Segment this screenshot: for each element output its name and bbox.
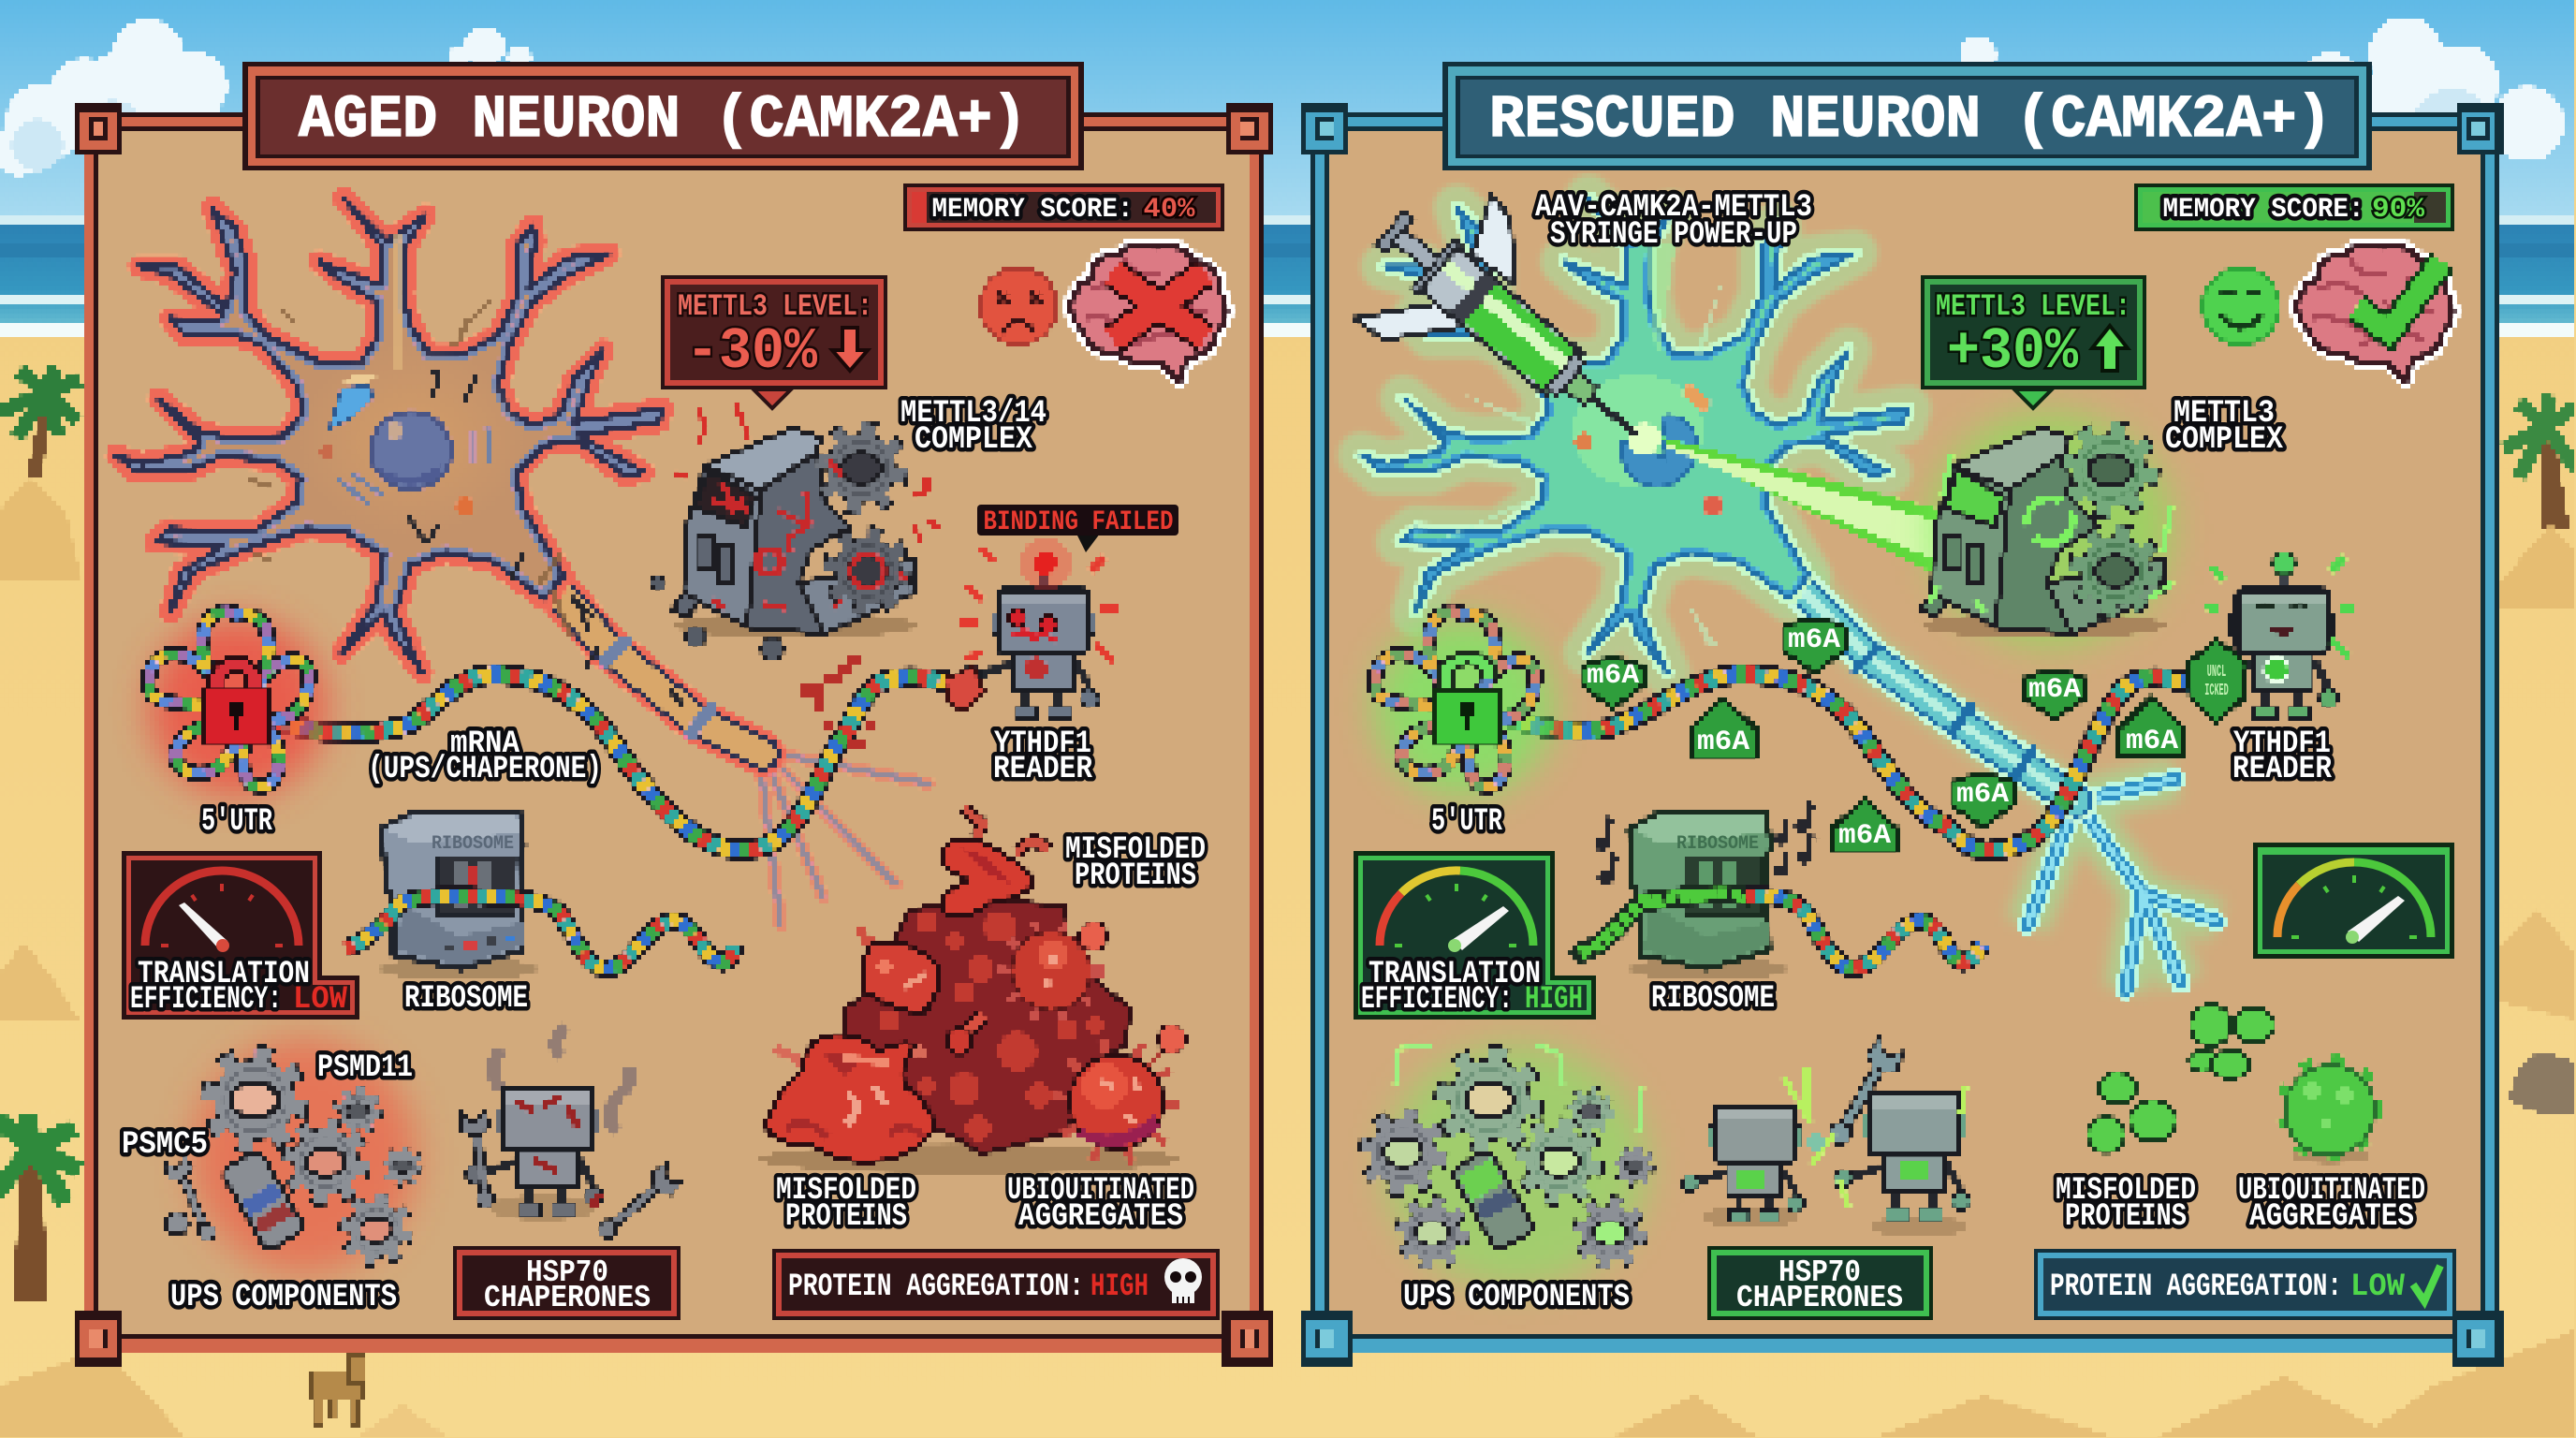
panel: rescued neuron xyxy=(1305,62,2499,1362)
labels: aged panel: RIBOSOME xyxy=(432,833,514,855)
label: HSP70 chaperones rescued: CHAPERONES xyxy=(1736,1281,1903,1315)
labels: aged panel: mRNA xyxy=(450,726,520,762)
gauge: translation efficiency high: EFFICIENCY: xyxy=(1361,982,1513,1018)
metric: memory score 40%: MEMORY SCORE: xyxy=(932,194,1133,226)
gauge: translation efficiency high: TRANSLATION xyxy=(1368,957,1541,992)
HSP70 robot: broken xyxy=(459,1025,684,1246)
icon: skull xyxy=(1164,1258,1202,1303)
metric: protein aggregation high xyxy=(772,1249,1220,1320)
gauge: translation efficiency high: HIGH xyxy=(1525,982,1583,1018)
UPS components: repaired gears xyxy=(1368,1044,1651,1287)
label: HSP70 chaperones xyxy=(453,1246,681,1320)
title banner: aged neuron xyxy=(242,62,1084,170)
UPS components: broken gears xyxy=(162,1039,419,1273)
pin: unlocked xyxy=(2188,639,2247,723)
pin label: unlocked: UNCL xyxy=(2207,663,2247,682)
aggregate ball xyxy=(1010,922,1107,1012)
panel: aged neuron xyxy=(76,62,1271,1362)
brain with red X xyxy=(1071,244,1226,381)
metric: protein aggregation low xyxy=(2034,1249,2456,1320)
ribosome: aged xyxy=(345,813,735,980)
beam: METTL3 expression xyxy=(1629,423,1939,576)
camel xyxy=(311,1356,365,1426)
callout: METTL3 level -30%: METTL3 LEVEL: xyxy=(678,289,872,324)
labels: aged panel: COMPLEX xyxy=(915,422,1033,458)
gauge: translation efficiency low: EFFICIENCY: xyxy=(130,982,282,1018)
METTL3 complex: powered machine xyxy=(1920,412,2174,646)
panel frame: aged xyxy=(76,108,1271,1362)
callout: METTL3 level -30% xyxy=(661,275,887,408)
misfolded lump: top xyxy=(942,808,1048,916)
labels: rescued panel: PROTEINS xyxy=(2065,1199,2187,1235)
label: HSP70 chaperones rescued xyxy=(1707,1246,1933,1320)
icon: check mark xyxy=(2413,1266,2440,1301)
misfolded lump: lower left xyxy=(765,1034,933,1162)
callout: METTL3 level +30% xyxy=(1921,275,2146,408)
labels: rescued panel: SYRINGE POWER-UP xyxy=(1550,217,1797,253)
mRNA strand: aged xyxy=(271,674,953,850)
callout: binding failed: BINDING FAILED xyxy=(983,506,1174,538)
callout: binding failed xyxy=(977,505,1178,552)
ubiquitinated aggregates: cleared xyxy=(2283,1062,2377,1164)
labels: aged panel: RIBOSOME xyxy=(404,981,528,1017)
m6A labels: m6A xyxy=(1838,820,1891,852)
labels: aged panel: UPS COMPONENTS xyxy=(170,1280,397,1315)
m6A labels: m6A xyxy=(1697,726,1749,758)
callout: METTL3 level -30%: -30% xyxy=(686,318,818,385)
labels: aged panel: (UPS/CHAPERONE) xyxy=(368,752,602,787)
labels: aged panel: YTHDF1 xyxy=(994,726,1091,762)
m6A labels xyxy=(1587,624,2178,852)
metric: memory score 90%: MEMORY SCORE: xyxy=(2162,194,2364,226)
labels: rescued panel: READER xyxy=(2232,752,2333,787)
callout: METTL3 level +30%: +30% xyxy=(1947,318,2079,385)
m6A markers xyxy=(1582,620,2185,852)
labels: rescued panel: UBIQUITINATED xyxy=(2238,1173,2425,1209)
labels: rescued panel: YTHDF1 xyxy=(2233,726,2331,762)
metric: protein aggregation low: PROTEIN AGGREGATION: xyxy=(2050,1269,2342,1305)
m6A labels: m6A xyxy=(1788,624,1840,656)
misfolded proteins: cleared xyxy=(2087,1005,2275,1152)
panel: rescued neuron: ICKED xyxy=(2204,682,2229,700)
palm: right xyxy=(2501,395,2576,609)
brain with green check xyxy=(2297,244,2452,381)
callout: METTL3 level +30%: METTL3 LEVEL: xyxy=(1936,289,2130,324)
gauge: translation efficiency low xyxy=(122,851,359,1020)
metric: memory score 40% xyxy=(903,183,1224,231)
palm: lower left xyxy=(0,1114,80,1301)
labels: aged panel: PSMD11 xyxy=(317,1050,413,1086)
ribosome: rescued xyxy=(1580,803,1982,980)
syringe power-up xyxy=(1354,195,1659,461)
metric: memory score 90%: 90% xyxy=(2372,194,2425,226)
metric: memory score 40%: 40% xyxy=(1144,194,1196,226)
label: HSP70 chaperones: CHAPERONES xyxy=(484,1281,651,1315)
gauge: translation efficiency low: TRANSLATION xyxy=(138,957,310,992)
sad face xyxy=(980,268,1057,345)
icon: down arrow xyxy=(832,328,868,371)
labels: aged panel: PROTEINS xyxy=(785,1199,907,1235)
metric: protein aggregation low: LOW xyxy=(2350,1269,2406,1305)
metric: protein aggregation high: PROTEIN AGGREGATION: xyxy=(788,1269,1084,1305)
m6A labels: m6A xyxy=(1587,660,1639,692)
labels: aged panel: READER xyxy=(993,752,1093,787)
labels: rescued panel: AAV-CAMK2A-METTL3 xyxy=(1535,190,1812,226)
rock xyxy=(2509,1053,2576,1115)
labels: rescued panel xyxy=(1403,190,2425,1315)
HSP70 robots: repairing xyxy=(1682,1035,1970,1238)
neuron: rescued xyxy=(1361,198,2217,990)
labels: aged panel: MISFOLDED xyxy=(776,1173,916,1209)
labels: aged panel: AGGREGATES xyxy=(1018,1199,1183,1235)
5'UTR lock: aged xyxy=(149,611,327,796)
label: HSP70 chaperones rescued: HSP70 xyxy=(1778,1255,1861,1290)
5'UTR lock: rescued xyxy=(1375,611,1553,796)
labels: aged panel: UBIQUITINATED xyxy=(1007,1173,1194,1209)
dunes xyxy=(0,908,2576,1438)
labels: aged panel: PROTEINS xyxy=(1075,858,1196,894)
title banner: rescued neuron: RESCUED NEURON (CAMK2A+) xyxy=(1489,87,2332,154)
labels: aged panel: 5'UTR xyxy=(201,804,272,840)
m6A labels: m6A xyxy=(2028,674,2081,706)
gauge: high, right xyxy=(2253,843,2454,959)
labels: rescued panel: UPS COMPONENTS xyxy=(1403,1280,1630,1315)
labels: aged panel: PSMC5 xyxy=(122,1127,208,1163)
labels: rescued panel: RIBOSOME xyxy=(1651,981,1775,1017)
METTL3/14 complex: damaged machine xyxy=(651,403,941,660)
labels: rescued panel: RIBOSOME xyxy=(1676,833,1759,855)
neuron: aged xyxy=(116,198,929,925)
labels: rescued panel: AGGREGATES xyxy=(2249,1199,2414,1235)
m6A labels: m6A xyxy=(2126,726,2178,757)
title banner: rescued neuron xyxy=(1442,62,2372,170)
panel frame: rescued xyxy=(1305,108,2499,1362)
gauge: translation efficiency low: LOW xyxy=(293,982,348,1018)
aggregate ball: lower right xyxy=(1066,1025,1186,1152)
m6A labels: m6A xyxy=(1956,779,2009,811)
smiley face xyxy=(2203,268,2279,345)
labels: aged panel: METTL3/14 xyxy=(900,396,1046,432)
labels: rescued panel: METTL3 xyxy=(2174,396,2275,432)
labels: rescued panel: 5'UTR xyxy=(1431,804,1502,840)
labels: rescued panel: MISFOLDED xyxy=(2056,1173,2196,1209)
labels: aged panel xyxy=(122,396,1206,1315)
icon: music notes xyxy=(1596,803,1818,883)
gauge: translation efficiency high xyxy=(1354,851,1596,1020)
YTHDF1 reader robot: active xyxy=(2188,552,2355,723)
red splatter xyxy=(800,655,877,748)
mRNA strand: rescued xyxy=(1502,674,2195,851)
misfolded protein pile xyxy=(758,808,1186,1174)
labels: rescued panel: COMPLEX xyxy=(2165,422,2284,458)
palm: upper left xyxy=(0,367,82,580)
metric: protein aggregation high: HIGH xyxy=(1090,1269,1149,1305)
label: HSP70 chaperones: HSP70 xyxy=(526,1255,608,1290)
labels: aged panel: MISFOLDED xyxy=(1065,832,1206,868)
YTHDF1 reader robot: binding failed xyxy=(945,537,1119,718)
metric: memory score 90% xyxy=(2134,183,2454,231)
title banner: aged neuron: AGED NEURON (CAMK2A+) xyxy=(299,87,1027,154)
icon: up arrow xyxy=(2092,326,2128,371)
misfolded lump: middle xyxy=(859,927,938,1013)
